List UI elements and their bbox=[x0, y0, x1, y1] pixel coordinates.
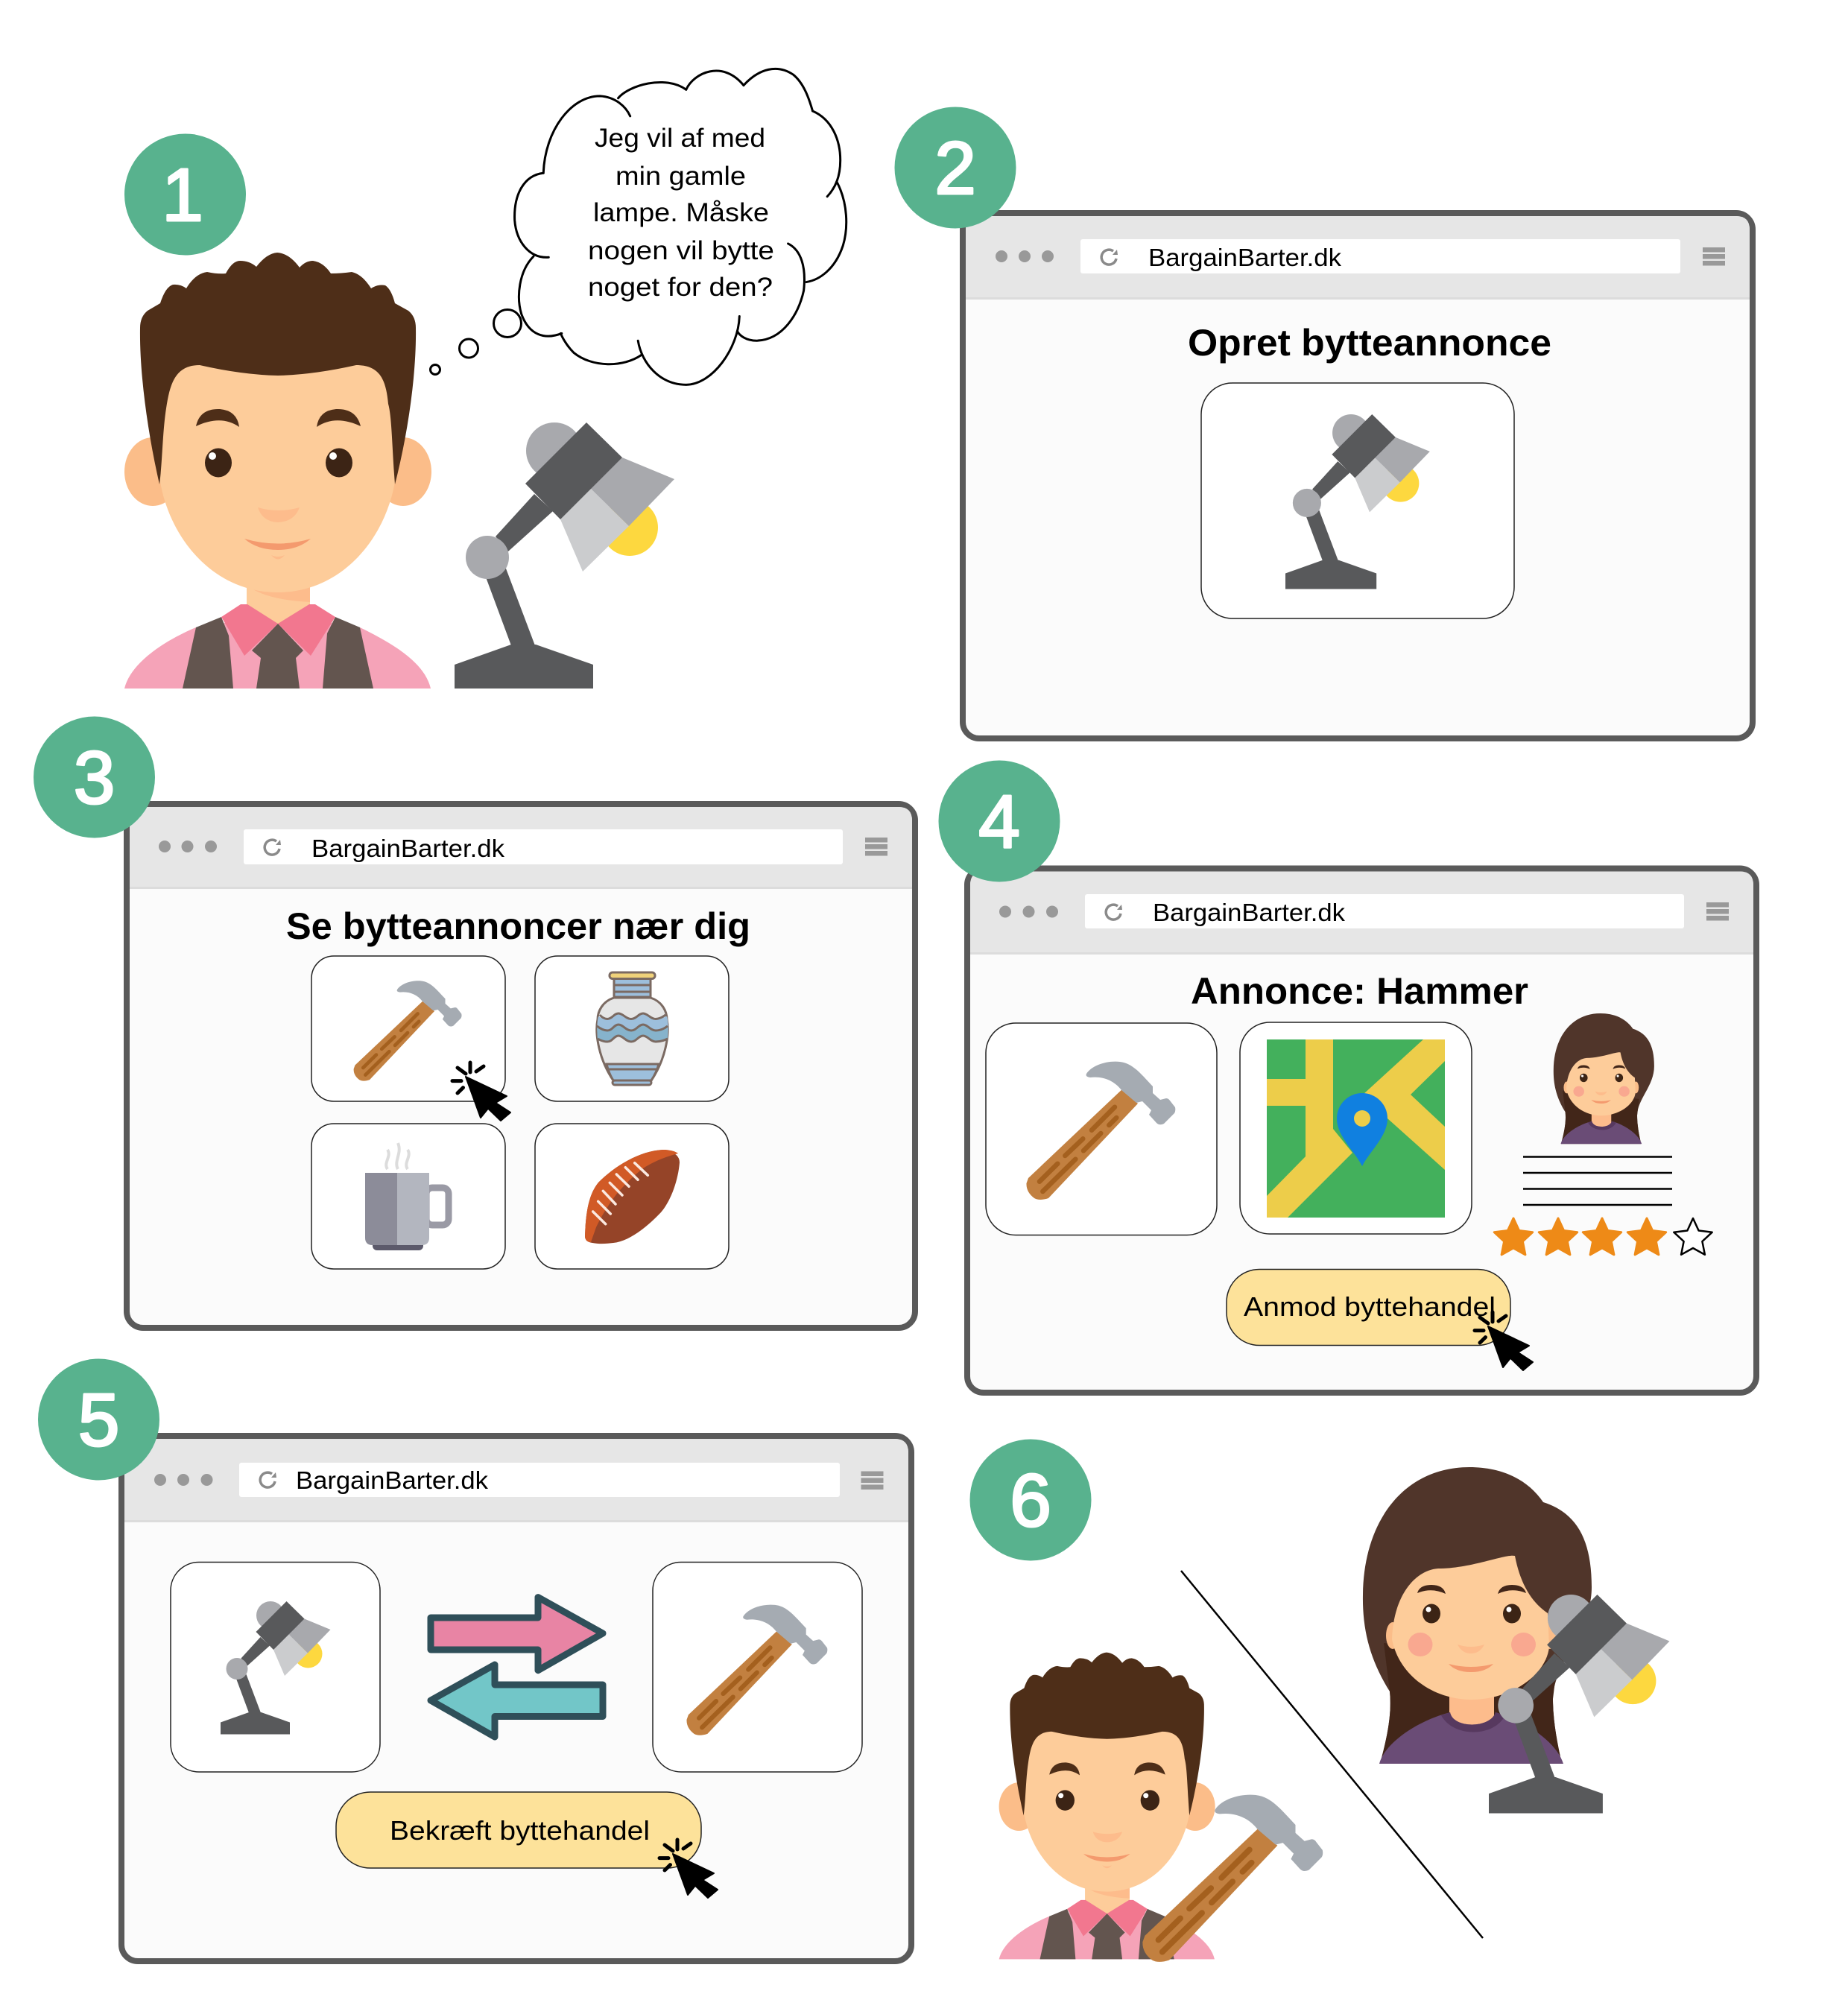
mug icon bbox=[365, 1143, 449, 1250]
card: hammer bbox=[653, 1562, 862, 1772]
button: confirm trade bbox=[336, 1792, 701, 1868]
browser header bar bbox=[966, 216, 1750, 299]
illustration: desk lamp bbox=[455, 422, 674, 689]
header divider bbox=[124, 1520, 908, 1522]
arrow: left teal bbox=[431, 1665, 603, 1737]
url text: BargainBarter.dk bbox=[1148, 244, 1342, 271]
step number badge 4 bbox=[939, 760, 1060, 882]
window dots bbox=[159, 841, 217, 852]
menu icon bbox=[861, 1471, 884, 1490]
step number badge 6: 6 bbox=[1010, 1459, 1051, 1542]
window dots bbox=[999, 906, 1058, 918]
lamp icon bbox=[221, 1601, 331, 1735]
browser header bar bbox=[124, 1439, 908, 1522]
card: lamp bbox=[171, 1562, 380, 1772]
header divider bbox=[130, 887, 912, 889]
card: hammer bbox=[986, 1023, 1217, 1235]
cursor click bbox=[659, 1840, 718, 1898]
illustration: woman bbox=[1363, 1467, 1592, 1764]
browser window frame bbox=[963, 213, 1753, 738]
step number badge 6 bbox=[970, 1440, 1091, 1560]
url text: BargainBarter.dk bbox=[1153, 899, 1346, 926]
heading: Annonce: Hammer bbox=[1191, 970, 1528, 1012]
thought bubble small circles bbox=[431, 310, 522, 374]
window dots bbox=[996, 250, 1054, 262]
step number badge 2 bbox=[894, 107, 1016, 228]
step number badge 3 bbox=[34, 717, 155, 838]
arrow: right pink bbox=[431, 1598, 603, 1671]
football icon bbox=[585, 1150, 680, 1244]
button: request trade bbox=[1227, 1270, 1510, 1346]
browser window frame bbox=[121, 1436, 911, 1961]
thought text: min gamle bbox=[616, 162, 746, 191]
browser window frame bbox=[967, 869, 1756, 1393]
hammer held by man bbox=[1142, 1795, 1323, 1962]
seller avatar bbox=[1554, 1013, 1654, 1144]
refresh icon bbox=[1106, 905, 1122, 919]
step number badge 5 bbox=[38, 1359, 159, 1480]
heading: Opret bytteannonce bbox=[1188, 322, 1551, 364]
lamp held by woman bbox=[1489, 1595, 1669, 1813]
panel: step 1 man thinking about lamp bbox=[124, 69, 847, 689]
refresh icon bbox=[265, 840, 281, 855]
thought text bbox=[588, 124, 774, 302]
panel: step 6 exchange complete bbox=[999, 1467, 1669, 1962]
address bar bbox=[1080, 239, 1680, 273]
browser header bar bbox=[130, 807, 912, 888]
thought text: noget for den? bbox=[588, 273, 773, 302]
hammer icon bbox=[354, 981, 462, 1081]
panel: step 3 browser nearby listings bbox=[127, 804, 915, 1328]
step number badge 1: 1 bbox=[162, 153, 203, 237]
card: hammer bbox=[311, 956, 505, 1101]
seller description lines bbox=[1523, 1156, 1672, 1205]
map pin bbox=[1337, 1093, 1387, 1166]
button label: Bekræft byttehandel bbox=[390, 1815, 650, 1846]
cursor click bbox=[1475, 1312, 1533, 1370]
address bar bbox=[244, 829, 843, 864]
browser header bar bbox=[970, 872, 1753, 954]
refresh icon bbox=[260, 1472, 276, 1487]
address bar bbox=[1085, 894, 1684, 928]
step number badge 1 bbox=[124, 134, 246, 255]
panel: step 2 browser create listing bbox=[963, 213, 1753, 738]
divider line bbox=[1181, 1571, 1483, 1938]
thought text: nogen vil bytte bbox=[588, 236, 774, 265]
header divider bbox=[970, 952, 1753, 955]
header divider bbox=[966, 297, 1750, 300]
card: vase bbox=[535, 956, 729, 1101]
refresh icon bbox=[1101, 250, 1118, 265]
thought text: lampe. Måske bbox=[593, 198, 769, 227]
thought bubble cloud bbox=[515, 69, 847, 384]
cursor click bbox=[452, 1063, 510, 1121]
illustration: man bbox=[999, 1653, 1215, 1959]
panel: step 4 browser listing detail bbox=[967, 869, 1756, 1393]
card: football bbox=[535, 1124, 729, 1269]
step number badge 2: 2 bbox=[934, 127, 976, 210]
vase icon bbox=[597, 972, 668, 1085]
step number badge 3: 3 bbox=[74, 736, 115, 820]
step number badge 4: 4 bbox=[978, 780, 1020, 864]
star rating bbox=[1494, 1218, 1712, 1255]
card: mug bbox=[311, 1124, 505, 1269]
heading: Se bytteannoncer nær dig bbox=[286, 905, 750, 947]
panel: step 5 browser confirm trade bbox=[121, 1436, 911, 1961]
illustration: man bbox=[124, 253, 431, 689]
step number badge 5: 5 bbox=[78, 1378, 119, 1462]
window dots bbox=[154, 1474, 213, 1486]
card: lamp image bbox=[1201, 383, 1514, 618]
map bbox=[1267, 1039, 1445, 1218]
thought text: Jeg vil af med bbox=[595, 124, 765, 153]
browser window frame bbox=[127, 804, 915, 1328]
hammer icon bbox=[687, 1605, 827, 1735]
url text: BargainBarter.dk bbox=[296, 1466, 489, 1494]
button label: Anmod byttehandel bbox=[1244, 1291, 1496, 1322]
address bar bbox=[239, 1463, 840, 1497]
menu icon bbox=[1703, 247, 1725, 265]
url text: BargainBarter.dk bbox=[311, 835, 505, 862]
menu icon bbox=[1706, 902, 1729, 921]
hammer icon bbox=[1026, 1062, 1175, 1200]
lamp icon bbox=[1285, 414, 1430, 589]
card: map bbox=[1240, 1022, 1472, 1234]
menu icon bbox=[865, 838, 887, 855]
